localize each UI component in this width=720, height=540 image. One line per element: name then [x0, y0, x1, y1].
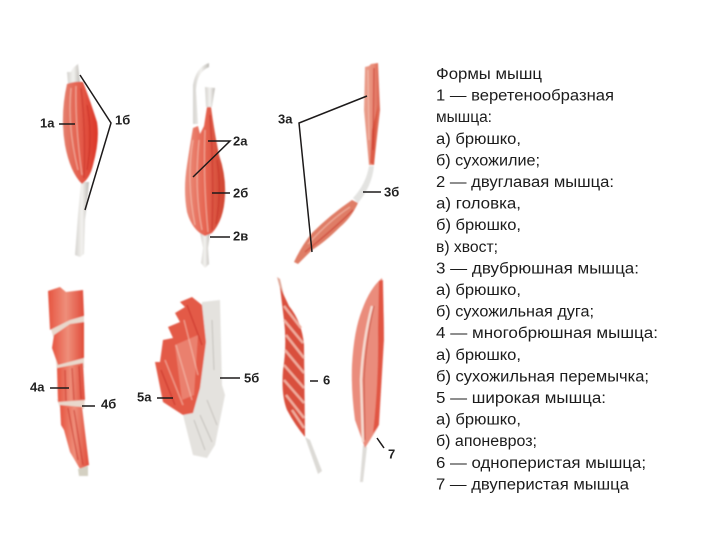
caption text block: 4 — многобрюшная мышца: — [436, 325, 658, 342]
segment 3 — [57, 363, 85, 402]
caption text block: в) хвост; — [436, 239, 498, 256]
figure labels: 6 — [323, 372, 330, 387]
caption text block: 5 — широкая мышца: — [436, 390, 606, 407]
tail tendon — [200, 233, 210, 268]
figure labels: 1б — [115, 112, 130, 127]
leader lines — [50, 75, 384, 448]
long head tendon — [193, 63, 209, 124]
figure labels — [30, 111, 399, 461]
lower belly — [294, 200, 358, 264]
figure labels: 7 — [388, 446, 395, 461]
right red edge — [373, 280, 384, 433]
short head tendon — [205, 87, 215, 107]
fibers — [165, 320, 198, 405]
figure labels: 5б — [244, 370, 259, 385]
caption text block: б) сухожильная перемычка; — [436, 368, 649, 385]
fibers — [284, 306, 304, 428]
tendon — [305, 437, 322, 474]
upper belly red core — [370, 105, 378, 165]
figure labels: 2б — [233, 185, 248, 200]
caption text block: 7 — двуперистая мышца — [436, 476, 629, 493]
upper tendon — [67, 64, 80, 84]
caption text block: мышца: — [436, 109, 492, 126]
belly — [280, 287, 305, 437]
muscle 4: polygastric — [48, 287, 89, 476]
tendon — [360, 445, 367, 482]
tendon bands behind segments — [50, 312, 85, 409]
caption text block: 1 — веретенообразная — [436, 88, 614, 105]
belly and heads — [185, 107, 225, 236]
caption text block: а) брюшко, — [436, 282, 521, 299]
figure labels: 1а — [40, 115, 55, 130]
fibers — [65, 366, 83, 465]
caption text block: 3 — двубрюшная мышца: — [436, 260, 639, 277]
caption text block: Формы мышц — [436, 66, 542, 83]
belly — [352, 278, 384, 448]
caption text block: а) брюшко, — [436, 347, 521, 364]
figure labels: 5а — [137, 389, 152, 404]
central slit — [361, 306, 372, 442]
muscle 7: bipennate — [352, 278, 384, 482]
figure labels: 3а — [278, 111, 293, 126]
segment 1 — [48, 287, 84, 330]
caption text block — [436, 66, 658, 493]
caption text block: 2 — двуглавая мышца: — [436, 174, 614, 191]
caption text block: б) апоневроз; — [436, 433, 537, 450]
fibers — [308, 70, 369, 244]
muscle 1: fusiform — [63, 64, 98, 257]
segment 4 — [60, 405, 89, 469]
caption text block: а) головка, — [436, 196, 521, 213]
intermediate tendon — [353, 166, 374, 203]
upper tendon — [277, 277, 285, 300]
aponeurosis strands — [194, 320, 217, 450]
caption text block: б) сухожильная дуга; — [436, 304, 594, 321]
caption text block: 6 — одноперистая мышца; — [436, 455, 646, 472]
upper belly — [364, 63, 380, 165]
figure labels: 2а — [233, 133, 248, 148]
muscle 2: biceps — [185, 63, 225, 268]
lower tendon — [75, 182, 89, 257]
caption text block: б) сухожилие; — [436, 152, 540, 169]
figure labels: 3б — [384, 184, 399, 199]
caption text block: а) брюшко, — [436, 412, 521, 429]
muscle 5: broad — [155, 297, 225, 458]
figure labels: 4а — [30, 379, 45, 394]
lower end — [78, 466, 88, 476]
muscle 3: digastric — [294, 63, 380, 264]
fibers — [70, 86, 82, 175]
figure labels: 2в — [233, 228, 248, 243]
belly — [63, 82, 98, 184]
caption text block: б) брюшко, — [436, 217, 521, 234]
shaded seam — [364, 306, 374, 440]
segment 2 — [52, 322, 84, 365]
fibers — [190, 130, 208, 232]
caption text block: а) брюшко, — [436, 131, 521, 148]
belly — [155, 297, 206, 415]
figure labels: 4б — [101, 396, 116, 411]
aponeurosis — [183, 300, 225, 458]
belly highlights — [175, 335, 198, 400]
muscle 6: unipennate — [277, 277, 322, 474]
